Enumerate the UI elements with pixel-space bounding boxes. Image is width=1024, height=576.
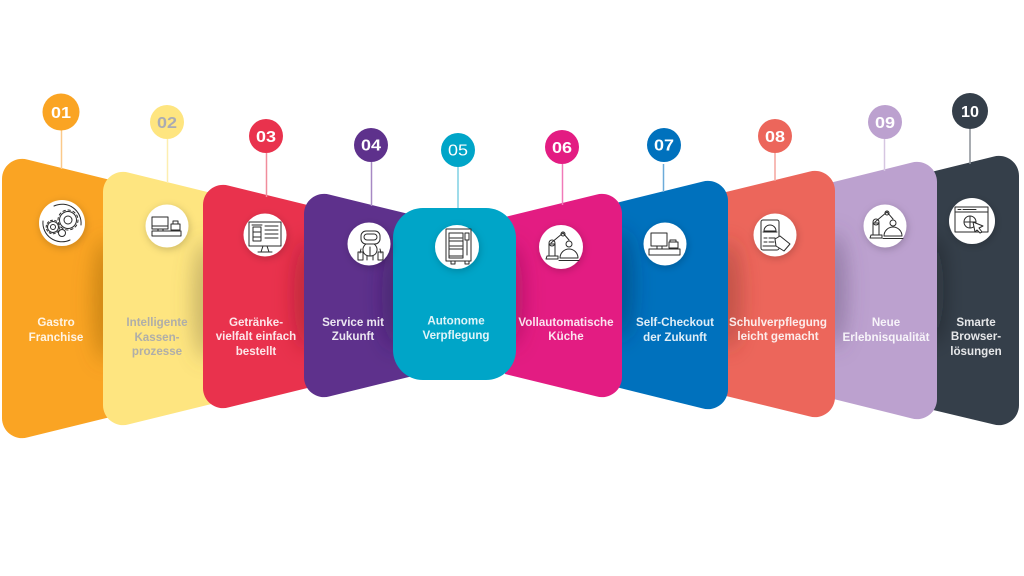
label 10: Smarte [956,316,996,329]
badge 02: 02 [157,115,177,132]
label 08: Schulverpflegung [729,316,827,329]
label 02: Intelligente [126,316,188,329]
stem 01 [60,130,62,169]
panel 07: Self-Checkout [607,181,728,409]
badge 01: 01 [51,105,71,122]
panel 04: Service mit Zukunft [304,194,414,397]
label 09: Neue [872,316,901,329]
label 05: Autonome [427,314,485,328]
stem 10 [969,129,971,164]
badge 09 [868,105,902,139]
badge 10: 10 [961,104,979,121]
label 08: leicht gemacht [737,330,819,343]
panel 09: Neue Erlebnisqualität [833,162,937,420]
icon: robot arm [864,204,906,248]
stem 05 [457,167,459,208]
badge 07 [647,128,681,162]
badge 02 [150,105,184,139]
panel 01: Gastro Franchise [2,159,119,438]
label 04: Service mit [322,316,384,329]
label 01: Franchise [29,331,84,344]
icon: robot [348,222,390,266]
icon: browser window [949,198,995,244]
panel 03: Getränkevielfalt [203,184,308,408]
badge 04: 04 [361,138,381,154]
badge 03 [249,119,283,153]
badge 05 [441,133,475,167]
icon: gears [39,200,85,246]
stem 04 [370,162,372,206]
badge 08 [758,119,792,153]
label 02: Kassen- [134,331,180,344]
label 04: Zukunft [332,330,374,343]
label 01: Gastro [37,316,75,329]
icon: drink menu monitor [244,214,286,256]
badge 06: 06 [552,140,572,157]
badge 08: 08 [765,129,785,146]
panel 08: Schulverpflegung [715,171,835,417]
label 10: lösungen [950,345,1002,358]
badge 05: 05 [448,142,468,160]
badge 09: 09 [875,115,895,132]
label 07: Self-Checkout [636,316,714,329]
label 09: Erlebnisqualität [843,331,930,344]
label 03: bestellt [236,345,276,358]
badge 10 [952,93,988,129]
badge 06 [545,130,579,164]
panel 10: Smarte Browserlösungen [924,156,1019,425]
stem 09 [884,139,886,171]
badge 07: 07 [654,138,674,154]
label 10: Browser- [951,330,1001,343]
panel 05: Autonome Verpflegung [393,208,516,380]
panel 06: Vollautomatische Küche [497,194,622,397]
label 06: Küche [548,330,584,343]
icon: school meal on phone [754,214,796,256]
icon: checkout desk [644,222,686,266]
badge 01 [42,94,80,130]
label 03: vielfalt einfach [216,330,296,343]
icon: vending machine [435,225,479,269]
icon: checkout desk [146,204,188,248]
icon: robot arm [539,225,583,269]
label 02: prozesse [132,345,183,358]
stem 02 [166,139,168,183]
badge 03: 03 [256,129,276,146]
panel 02: Intelligente Kassenprozesse [103,172,219,425]
stem 07 [662,164,664,192]
label 07: der Zukunft [643,331,707,344]
badge 04 [354,128,388,162]
stem 03 [266,153,268,197]
stem 06 [562,164,564,205]
stem 08 [774,153,776,181]
label 06: Vollautomatische [518,316,614,329]
label 05: Verpflegung [422,329,490,342]
label 03: Getränke- [229,316,283,329]
